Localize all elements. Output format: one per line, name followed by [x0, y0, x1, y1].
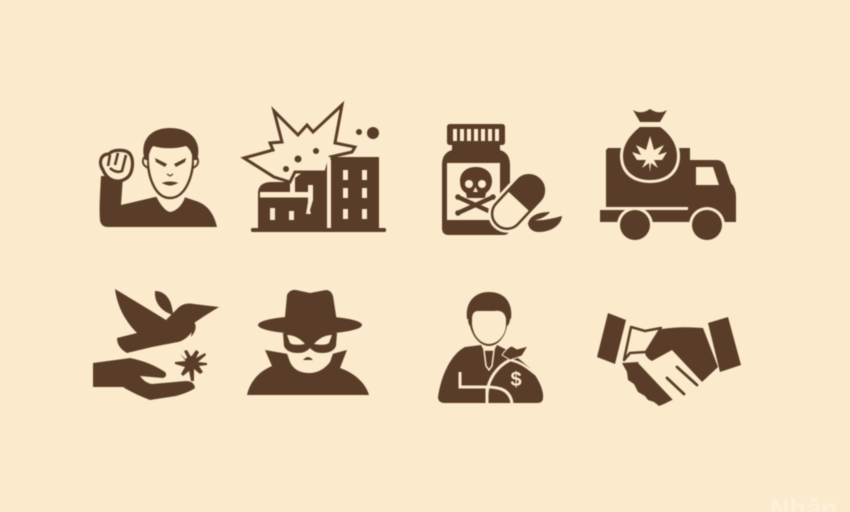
icon: spy in hat and trench coat — [247, 290, 369, 395]
icon: businessman with money bag: $ — [510, 369, 522, 391]
icon: poison bottle with pills — [442, 124, 562, 241]
icon: handshake — [597, 313, 741, 406]
icon: protester raising fist — [100, 128, 217, 227]
icon: dove above hand with cannabis leaf — [93, 289, 219, 400]
icon: businessman with money bag — [438, 292, 543, 403]
icon: delivery truck with cannabis bag — [600, 109, 736, 243]
icon: exploding building — [244, 105, 386, 232]
